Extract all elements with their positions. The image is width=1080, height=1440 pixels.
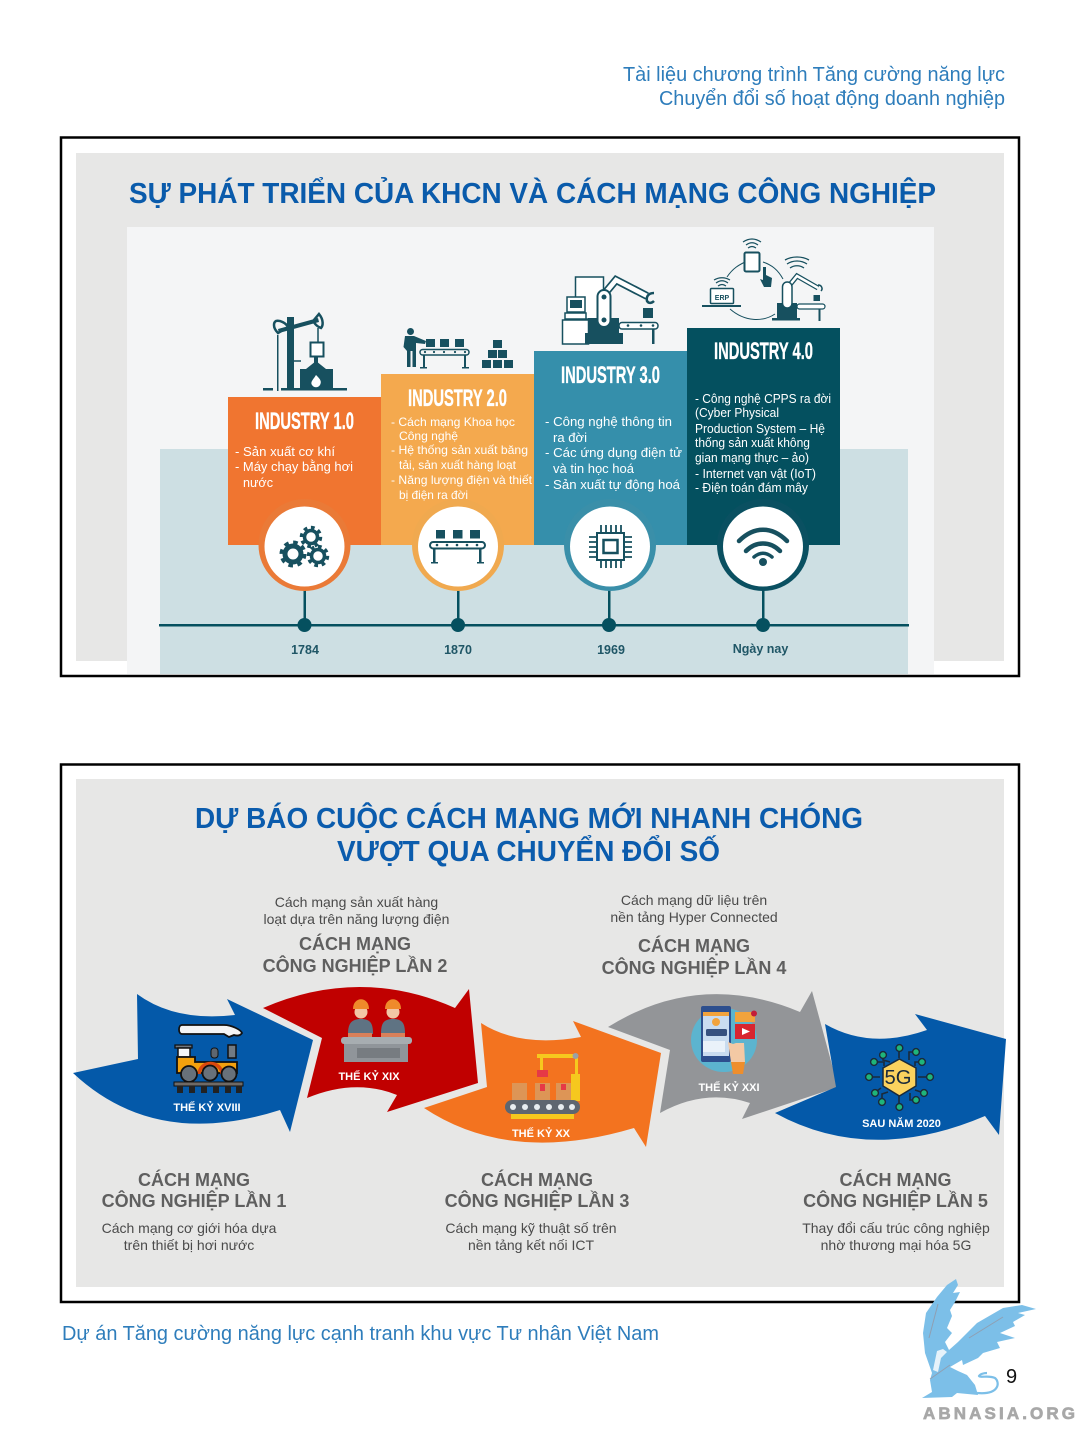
timeline axis xyxy=(159,588,909,632)
column: industry 1.0: - Máy chạy bằng hơi xyxy=(235,459,353,474)
arrow: orange 20th century xyxy=(424,1021,661,1147)
text: revolution 2 xyxy=(263,894,449,976)
panel: forecast xyxy=(61,764,1019,1302)
text: revolution 2: CÔNG NGHIỆP LẦN 2 xyxy=(263,955,447,976)
column: industry 1.0: nước xyxy=(243,475,273,490)
column: industry 4.0: INDUSTRY 4.0 xyxy=(714,338,813,365)
icon: steam train xyxy=(174,1025,243,1093)
icon: oil pump xyxy=(263,314,347,391)
icon: conveyor xyxy=(430,530,485,564)
years: Ngày nay xyxy=(733,642,788,656)
icon: worker and boxes xyxy=(404,328,513,368)
icon: gears xyxy=(282,528,328,566)
icon: robot arm xyxy=(562,277,658,344)
column: industry 2.0: Công nghệ xyxy=(399,429,458,443)
column: industry 1.0 xyxy=(228,314,381,591)
text: revolution 1: CÔNG NGHIỆP LẦN 1 xyxy=(102,1190,286,1211)
text: revolution 3: Cách mạng kỹ thuật số trên xyxy=(445,1220,617,1236)
heading: industry evolution: SỰ PHÁT TRIỂN CỦA KHCN VÀ CÁCH MẠNG CÔNG NGHIỆP xyxy=(129,176,936,210)
column: industry 4.0: (Cyber Physical xyxy=(695,406,779,420)
column: industry 3.0: - Công nghệ thông tin xyxy=(545,414,672,429)
arrow: grey 21st century xyxy=(608,991,838,1119)
column: industry 3.0: - Sản xuất tự động hoá xyxy=(545,477,681,492)
text: revolution 4: CÔNG NGHIỆP LẦN 4 xyxy=(602,957,786,978)
column: industry 2.0: INDUSTRY 2.0 xyxy=(408,385,507,412)
column: industry 2.0: tải, sản xuất hàng loạt xyxy=(399,458,517,472)
column: industry 4.0: - Công nghệ CPPS ra đời xyxy=(695,392,831,406)
text: revolution 5 xyxy=(802,1169,990,1253)
text: revolution 1 xyxy=(102,1169,286,1253)
column: industry 4.0: Production System – Hệ xyxy=(695,422,825,436)
heading: forecast xyxy=(195,801,863,868)
text: revolution 1: Cách mạng cơ giới hóa dựa xyxy=(102,1220,277,1236)
logo: griffin: ABNASIA.ORG xyxy=(923,1404,1075,1423)
icon: mobile app xyxy=(691,1006,757,1074)
logo: griffin xyxy=(922,1279,1075,1423)
column: industry 4.0: - Điện toán đám mây xyxy=(695,481,809,495)
text: revolution 4 xyxy=(602,892,786,978)
arrow: orange 20th century: THẾ KỶ XX xyxy=(512,1127,571,1140)
footer text: Dự án Tăng cường năng lực cạnh tranh khu vực Tư nhân Việt Nam xyxy=(62,1323,659,1345)
column: industry 2.0: - Hệ thống sản xuất băng xyxy=(391,443,528,457)
text: revolution 3: nền tảng kết nối ICT xyxy=(468,1237,594,1253)
column: industry 3.0 xyxy=(534,277,687,591)
column: industry 4.0: - Internet vạn vật (IoT) xyxy=(695,467,816,481)
heading: forecast: DỰ BÁO CUỘC CÁCH MẠNG MỚI NHANH CHÓNG xyxy=(195,801,863,835)
column: industry 3.0: - Các ứng dụng điện tử xyxy=(545,445,682,460)
icon: chip xyxy=(589,525,632,568)
column: industry 1.0: INDUSTRY 1.0 xyxy=(255,408,354,435)
column: industry 2.0: - Năng lượng điện và thiết xyxy=(391,473,533,487)
column: industry 2.0: bị điện ra đời xyxy=(399,488,468,502)
text: revolution 5: Thay đổi cấu trúc công nghiệp xyxy=(802,1220,990,1236)
heading: forecast: VƯỢT QUA CHUYỂN ĐỔI SỐ xyxy=(337,834,720,868)
arrow: grey 21st century: THẾ KỶ XXI xyxy=(698,1081,760,1094)
years xyxy=(291,642,788,657)
column: industry 3.0: INDUSTRY 3.0 xyxy=(561,362,660,389)
text: revolution 2: loạt dựa trên năng lượng điện xyxy=(264,911,449,927)
arrow: blue after 2020 xyxy=(775,1014,1006,1140)
text: revolution 2: CÁCH MẠNG xyxy=(299,933,411,954)
text: revolution 1: CÁCH MẠNG xyxy=(138,1169,250,1190)
header text: Chuyển đổi số hoạt động doanh nghiệp xyxy=(659,88,1005,110)
text: revolution 4: nền tảng Hyper Connected xyxy=(610,909,778,925)
arrow: red 19th century: THẾ KỶ XIX xyxy=(338,1070,400,1083)
text: revolution 5: CÁCH MẠNG xyxy=(840,1169,952,1190)
text: revolution 3: CÁCH MẠNG xyxy=(481,1169,593,1190)
text: revolution 1: trên thiết bị hơi nước xyxy=(124,1237,254,1253)
column: industry 3.0: ra đời xyxy=(553,430,587,445)
icon: workers at console xyxy=(341,999,412,1062)
header text xyxy=(623,64,1005,110)
column: industry 4.0: thống sản xuất không xyxy=(695,436,810,450)
arrow: blue 18th century xyxy=(73,994,313,1132)
column: industry 2.0: - Cách mạng Khoa học xyxy=(391,415,515,429)
icon: connected factory xyxy=(702,239,825,321)
arrow: red 19th century xyxy=(263,987,478,1112)
icon: 5G network xyxy=(866,1045,933,1110)
years: 1784 xyxy=(291,643,319,657)
text: revolution 4: CÁCH MẠNG xyxy=(638,935,750,956)
column: industry 3.0: và tin học hoá xyxy=(553,461,635,476)
text: revolution 3 xyxy=(445,1169,629,1253)
page number: 9 xyxy=(1006,1366,1017,1388)
arrow: blue after 2020: SAU NĂM 2020 xyxy=(862,1117,941,1130)
panel: industry evolution xyxy=(61,138,1019,676)
icon: robotic packing line xyxy=(505,1053,580,1119)
text: revolution 2: Cách mạng sản xuất hàng xyxy=(275,894,438,910)
text: revolution 5: CÔNG NGHIỆP LẦN 5 xyxy=(803,1190,988,1211)
column: industry 4.0: gian mạng thực – ảo) xyxy=(695,451,809,465)
column: industry 4.0 xyxy=(687,239,840,591)
icon: connected factory: ERP xyxy=(715,295,730,302)
years: 1969 xyxy=(597,643,625,657)
column: industry 2.0 xyxy=(381,328,534,591)
text: revolution 5: nhờ thương mại hóa 5G xyxy=(821,1237,971,1253)
icon: 5G network: 5G xyxy=(884,1067,912,1089)
column: industry 1.0: - Sản xuất cơ khí xyxy=(235,444,335,459)
icon: wifi xyxy=(739,530,787,566)
text: revolution 4: Cách mạng dữ liệu trên xyxy=(621,892,767,908)
arrow: blue 18th century: THẾ KỶ XVIII xyxy=(173,1101,241,1114)
text: revolution 3: CÔNG NGHIỆP LẦN 3 xyxy=(445,1190,629,1211)
years: 1870 xyxy=(444,643,472,657)
header text: Tài liệu chương trình Tăng cường năng lực xyxy=(623,64,1005,86)
